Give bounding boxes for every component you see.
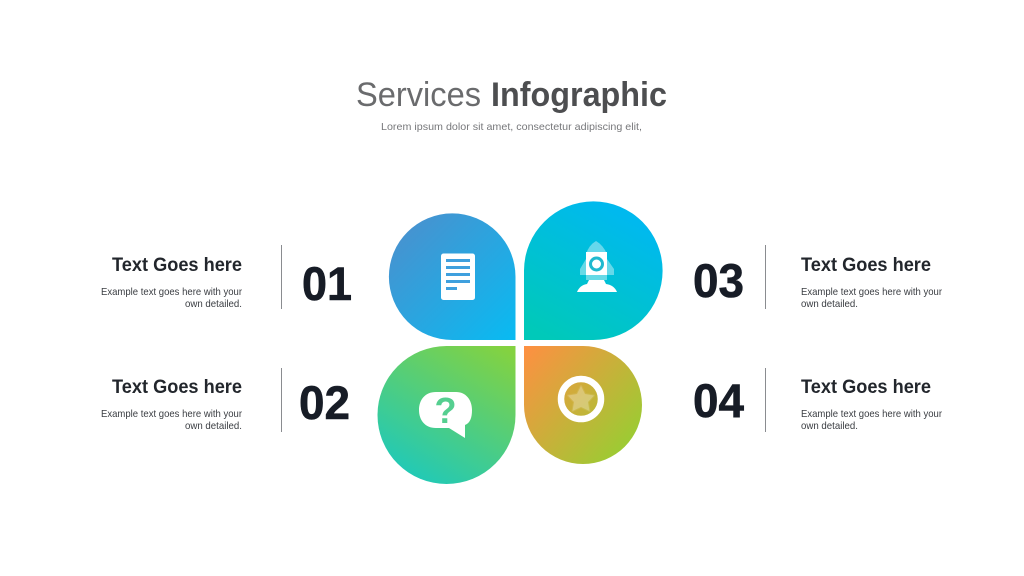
heading: Text Goes here [801,255,931,276]
item 02 text [101,377,242,432]
icon: rocket [577,241,617,292]
description: Example text goes here with your [101,286,242,298]
subtitle: Lorem ipsum dolor sit amet, consectetur adipiscing elit, [381,121,642,133]
description [801,408,942,432]
description: Example text goes here with your [801,286,942,298]
petal 02: green question [378,346,516,484]
description: Example text goes here with your [801,408,942,420]
description [101,286,242,310]
number 04: 04 [693,374,744,427]
number 02: 02 [299,376,350,429]
petal 04: orange star [524,346,642,464]
item 04 text [801,377,942,432]
description: own detailed. [801,420,858,432]
description: own detailed. [185,298,242,310]
petal 03: cyan rocket [524,201,663,340]
description: Example text goes here with your [101,408,242,420]
description [101,408,242,432]
title: Services [356,76,481,114]
heading: Text Goes here [112,255,242,276]
icon: document [441,254,475,300]
number 03: 03 [693,254,744,307]
description [801,286,942,310]
heading: Text Goes here [801,377,931,398]
icon: star in ring [561,379,601,419]
number 01: 01 [302,257,352,310]
heading: Text Goes here [112,377,242,398]
petal 01: blue document [389,213,516,340]
description: own detailed. [185,420,242,432]
title bold: Infographic [491,76,667,114]
description: own detailed. [801,298,858,310]
icon: speech bubble with question mark: ? [434,390,456,431]
item 03 text [801,255,942,310]
item 01 text [101,255,242,310]
